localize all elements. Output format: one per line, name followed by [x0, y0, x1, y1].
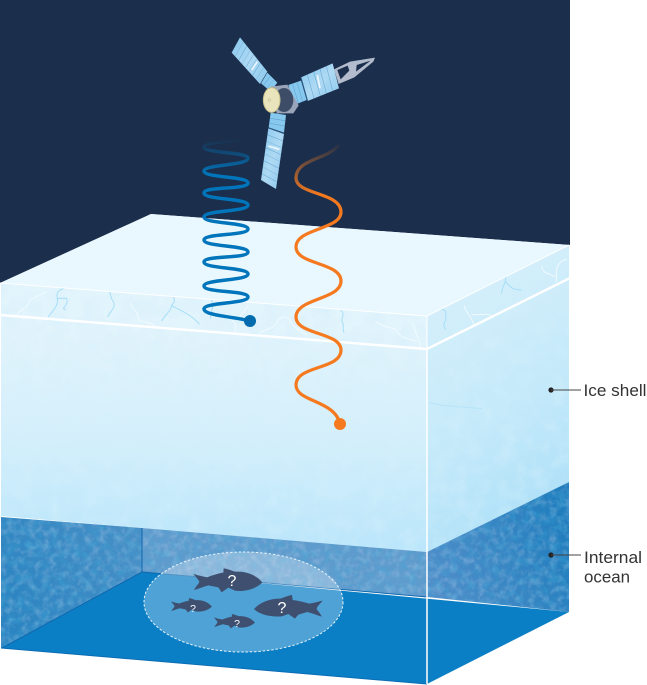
ocean floor: [1, 572, 569, 684]
ocean left wall: [1, 517, 142, 648]
space background: [0, 0, 570, 283]
habitat ellipse: [144, 552, 343, 652]
label: ice shell: Ice shell: [584, 382, 646, 400]
dashed circle with fish: [144, 552, 343, 652]
ice right face: [427, 245, 569, 552]
satellite: [232, 37, 375, 189]
fish 4: ?: [234, 618, 240, 630]
internal ocean: [0, 480, 570, 684]
orange signal end point: [334, 418, 346, 430]
white layer line: [0, 278, 570, 349]
ice front face: [1, 283, 427, 552]
top face of ice: [0, 214, 570, 316]
label: ice shell: [548, 382, 646, 400]
blue short-wavelength signal: [204, 139, 256, 327]
fish 2: ?: [278, 600, 287, 617]
upper ice band with cracks: [17, 259, 567, 409]
fish 1: [193, 568, 262, 592]
fish 4: [214, 614, 255, 630]
dish antenna: [263, 88, 280, 112]
label: internal ocean: ocean: [584, 568, 630, 586]
orange long-wavelength signal: [296, 143, 346, 430]
label: internal ocean: [548, 549, 642, 586]
spacecraft body: [271, 85, 299, 113]
blue signal end point: [244, 315, 256, 327]
fish 3: [171, 598, 212, 615]
fish 1: ?: [228, 573, 237, 590]
ocean inner edges: [2, 528, 427, 648]
ice block: [0, 214, 570, 555]
label: internal ocean: Internal: [584, 549, 642, 567]
fish 2: [254, 595, 323, 619]
ocean right face: [427, 482, 569, 612]
solar panel right: [288, 63, 339, 105]
front vertical edge: [426, 349, 428, 684]
magnetometer arm: [334, 58, 375, 84]
fish 3: ?: [190, 603, 196, 615]
top edges: [0, 245, 569, 349]
ocean back wall: [142, 528, 427, 597]
solar panel bottom: [261, 113, 286, 189]
solar panel upper-left: [232, 37, 277, 92]
